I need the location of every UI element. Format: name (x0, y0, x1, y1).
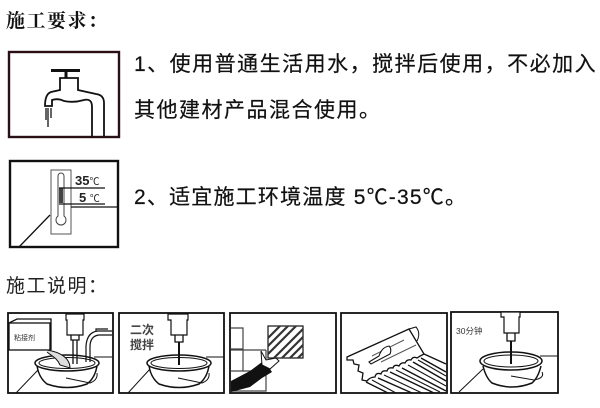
panel: mix powder and water: 粘接剂 (14, 333, 35, 342)
panel: stir 30 minutes (451, 312, 558, 393)
text: requirement 1 (134, 52, 597, 122)
icon: thermometer 5 to 35 degrees (10, 161, 118, 247)
text: requirement 1: 其他建材产品混合使用。 (134, 99, 382, 122)
panel: mix powder and water (8, 313, 113, 393)
panel: notched trowel (341, 313, 447, 393)
panel: second stirring: 二次 (130, 322, 154, 337)
text: requirement 1: 1、使用普通生活用水，搅拌后使用，不必加入 (134, 53, 597, 76)
icon: thermometer 5 to 35 degrees: 5 ℃ (79, 190, 100, 205)
text: requirement 2: 2、适宜施工环境温度 5℃-35℃。 (134, 186, 467, 209)
icon: water tap (9, 52, 119, 137)
heading: construction requirements: 施工要求： (6, 11, 109, 32)
heading: construction instructions: 施工说明： (6, 276, 109, 297)
icon: thermometer 5 to 35 degrees: 35℃ (75, 173, 99, 188)
panel: apply to tile (230, 313, 336, 393)
panel: second stirring: 搅拌 (130, 337, 154, 352)
panel: stir 30 minutes: 30分钟 (456, 326, 482, 336)
panel: second stirring (119, 313, 224, 393)
